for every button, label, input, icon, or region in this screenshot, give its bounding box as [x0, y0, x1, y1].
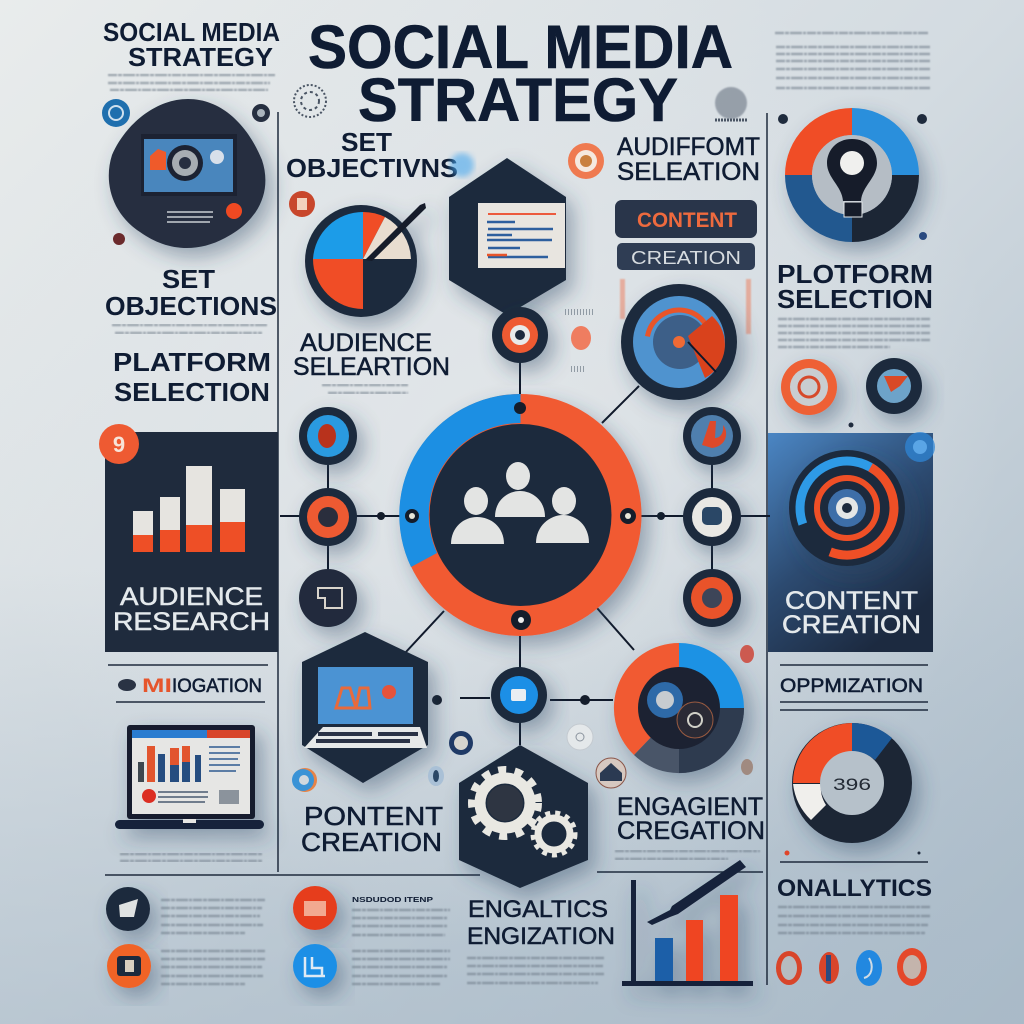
title: [308, 13, 733, 134]
text block: [112, 325, 268, 333]
label: audience research: AUDIENCE: [120, 583, 263, 611]
heading: pontent creation: CREATION: [301, 827, 442, 857]
icon: small red oval top: [740, 645, 754, 663]
text block: [775, 33, 930, 88]
icon: stamp right of title: [715, 87, 748, 120]
heading: engaltics engization: ENGALTICS: [468, 896, 608, 923]
connector: gauge to center ring: [602, 386, 639, 423]
node: top: [492, 307, 548, 363]
heading: audience selearion: SELEARTION: [293, 353, 450, 381]
node: bottom: [491, 667, 547, 723]
icon: blue badge: [102, 99, 130, 127]
ring joints: [405, 402, 636, 630]
heading: onallytics: ONALLYTICS: [777, 875, 932, 902]
icon: red badge: [293, 886, 337, 930]
heading: engagient creation: [617, 793, 765, 845]
heading: platform selection left: SELECTION: [114, 377, 270, 407]
panel: bottom right optimization and analytics: [776, 665, 932, 986]
icon: pen: [365, 203, 426, 261]
label: content creation: CONTENT: [785, 587, 918, 615]
icon: small pale badge: [428, 766, 444, 786]
icon: small dark dots: [778, 114, 927, 240]
heading: engaltics engization: [467, 896, 615, 950]
heading: plotform selection: PLOTFORM: [777, 259, 933, 289]
icon: orange number badge: 9: [113, 432, 125, 457]
heading: audience selearion: AUDIENCE: [300, 329, 432, 357]
text block: [108, 75, 275, 90]
icon: orange badge: [107, 944, 151, 988]
label: content creation: [782, 587, 921, 639]
text block: [120, 854, 263, 861]
icon: small gear: [533, 813, 575, 855]
label box: creation: CREATION: [631, 248, 741, 268]
heading: set objectivns: [286, 127, 458, 183]
heading: engagient creation: CREGATION: [617, 817, 765, 845]
heading: engagient creation: ENGAGIENT: [617, 793, 763, 821]
donut with light bulb: [785, 108, 919, 242]
donut chart: [792, 723, 912, 843]
pie chart: objectives: [305, 203, 426, 317]
connector nodes: [377, 512, 665, 705]
text block: [615, 851, 760, 859]
heading: social media strategy: [103, 17, 280, 72]
text block: [322, 385, 408, 393]
label box: creation: [617, 243, 755, 270]
hexagon: laptop: [302, 632, 428, 783]
heading: set objections: [105, 264, 277, 321]
heading: set objectivns: OBJECTIVNS: [286, 153, 458, 183]
text block: [115, 409, 268, 411]
node: left upper: [299, 407, 357, 465]
heading: audifomt seleation: [617, 133, 760, 186]
heading: pontent creation: PONTENT: [304, 801, 443, 831]
chart value: 396: [833, 775, 871, 794]
label: migration: MI: [142, 676, 172, 697]
label box: content: [615, 200, 757, 238]
donut: engagement: [614, 643, 744, 773]
hexagon: gears: [459, 745, 588, 888]
panel: content creation: [768, 433, 933, 652]
icon: small red oval bottom: [741, 759, 753, 775]
icon row: ovals: [776, 948, 927, 986]
icon: house badge: [596, 758, 626, 788]
heading: set objections: OBJECTIONS: [105, 291, 277, 321]
icon: laptop with charts: [115, 725, 264, 829]
icon: trend arrow: [647, 860, 746, 925]
panel: right top: [775, 33, 933, 428]
icon: small orange oval: [571, 326, 591, 350]
text block: [161, 900, 265, 933]
heading: audifomt seleation: SELEATION: [617, 158, 760, 186]
icon: target rings: [783, 444, 911, 572]
text block: [352, 951, 450, 984]
panel divider lines: [105, 112, 767, 985]
icon: small pale disc: [567, 724, 593, 750]
rule: [780, 861, 928, 863]
small heading and text block: NSDUDOD ITENP: [352, 897, 433, 904]
node: left middle: [299, 488, 357, 546]
text block: [467, 958, 605, 983]
gauge: target dial: [621, 284, 737, 400]
icon: dark at sign: [866, 358, 922, 414]
label: audience research: RESEARCH: [113, 608, 270, 636]
small heading and text block: [352, 897, 450, 935]
icon: large gear: [472, 770, 538, 836]
text block: [778, 907, 930, 933]
icon: small orange blue badge: [292, 768, 317, 792]
heading: engaltics engization: ENGIZATION: [467, 923, 615, 950]
heading: platform selection left: PLATFORM: [113, 347, 271, 377]
icon: blue badge: [905, 432, 935, 462]
heading: plotform selection: SELECTION: [777, 284, 933, 314]
hexagon: report screen: [449, 158, 566, 315]
text block: [778, 319, 930, 347]
heading: set objections: SET: [162, 264, 215, 294]
label: content creation: CREATION: [782, 611, 921, 639]
heading: plotform selection: [777, 259, 933, 314]
decoration: orange fade bars: [620, 279, 751, 334]
node: right middle: [683, 488, 741, 546]
label: migration: [118, 676, 262, 697]
icon: small red dot: [113, 233, 125, 245]
heading: audience selearion: [293, 329, 450, 381]
icon: orange number badge: [99, 424, 139, 464]
center ring with audience: [399, 394, 642, 636]
icon: people: [451, 462, 589, 544]
icon: small markers: [784, 850, 920, 856]
panel: bottom left migration: [108, 665, 268, 861]
heading: platform selection left: [113, 347, 271, 407]
title: STRATEGY: [358, 66, 678, 134]
heading: pontent creation: [301, 801, 443, 857]
node: left lower: [299, 569, 357, 627]
bar chart: [133, 466, 245, 552]
heading: social media strategy: STRATEGY: [128, 42, 273, 72]
bar chart with trend arrow: [622, 860, 753, 986]
node: right lower: [683, 569, 741, 627]
label: audience research: [113, 583, 270, 636]
panel: audience research: [105, 432, 278, 652]
icon: small blue ring: [449, 731, 473, 755]
decoration: small tick labels: [565, 312, 594, 369]
network connectors: [280, 310, 770, 745]
icon: blue badge: [293, 944, 337, 988]
icon: blue glow: [450, 153, 474, 177]
icon: stamp left of title: [294, 85, 326, 117]
icon: small dark badge: [252, 104, 270, 122]
heading: set objectivns: SET: [341, 127, 392, 157]
icon: orange at sign: [781, 359, 837, 415]
rule: [108, 665, 268, 702]
panel: top left social media strategy: [102, 17, 280, 333]
title: SOCIAL MEDIA: [308, 13, 733, 81]
icon: orange target badge: [568, 143, 604, 179]
label box: content: CONTENT: [637, 209, 737, 232]
heading: audifomt seleation: AUDIFFOMT: [617, 133, 760, 161]
icon: device blob: [109, 99, 265, 248]
icon: bird badge: [106, 887, 150, 931]
label: migration: IOGATION: [172, 676, 262, 697]
icon: orange html badge: [289, 191, 315, 217]
heading: social media strategy: SOCIAL MEDIA: [103, 17, 280, 47]
panel: bottom social list: [106, 886, 450, 988]
text block: [161, 951, 265, 984]
label: optimization: OPPMIZATION: [780, 676, 923, 697]
node: right upper: [683, 407, 741, 465]
rule: [780, 665, 928, 710]
